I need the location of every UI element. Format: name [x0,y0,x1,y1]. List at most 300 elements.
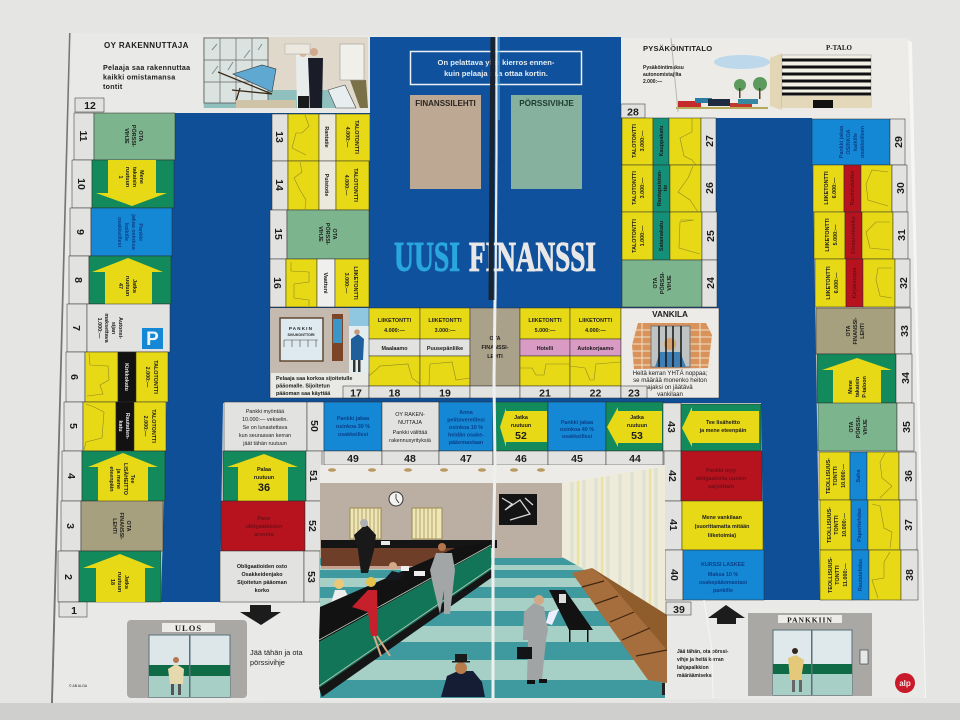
space 37 [820,500,917,550]
barred windows [350,508,442,539]
square number 1: 1 [71,605,77,617]
space 10: 10 [75,178,87,190]
icon: parking sign: P [146,329,159,350]
space 3: OTA [125,521,131,531]
space 4 [62,451,165,501]
space 51: 51 [307,470,319,482]
space 46: Jatka [514,415,528,421]
space 50: 50 [308,420,320,432]
space 11: 11 [77,130,89,142]
space 18: LIIKETONTTI [378,318,411,324]
space 50 [224,402,324,451]
space 21: LIIKETONTTI [528,318,562,324]
space 31: LIIKETONTTI [825,218,831,252]
space 19: LIIKETONTTI [428,318,462,324]
space 24: VIHJE [667,275,673,291]
space 26: tie [663,185,669,191]
space 16: LIIKETONTTI [352,266,358,300]
space 42: 42 [666,470,678,482]
space 16: Vaattuni [322,273,328,294]
space 19: 3.000:— [435,328,456,334]
space 4: eteenpäin [108,466,114,492]
panel: Oy Rakennuttaja [75,37,368,112]
space 51 [223,451,322,501]
space 11 [74,113,175,160]
space 37: Paperitehdas [857,508,863,542]
clerk behind counter [384,562,409,580]
space 11: VIHJE [123,128,129,144]
space 34: takaisin [855,377,861,397]
space 37: 10.000:— [842,513,848,537]
space 26: 3.000:— [640,177,646,198]
space 14: Puistotie [323,174,329,196]
space 26: Rantapuiston- [657,170,663,206]
rule box: kuin pelaaja saa ottaa kortin. [444,69,548,78]
space 25: 25 [705,230,717,242]
space 53: 53 [305,571,317,583]
space 5: 5 [67,423,79,429]
arrow: down [240,605,281,625]
space 36: 36 [903,470,915,482]
rule box: On pelattava yksi kierros ennen- [438,58,554,67]
space 29: 29 [893,136,905,148]
space 29: osakkeilleen [860,126,866,158]
space 29: kaikille [853,133,859,151]
space 43: ja mene eteenpäin [699,428,746,434]
space 8: Jatka [131,279,137,293]
panel: bank branch space 17 [270,308,369,400]
space 41: Mene vankilaan [702,515,742,521]
space 15: VIHJE [317,226,323,242]
illustration: bank window: SIVUKONTTORI [287,333,315,337]
space 30: 6.000:— [832,177,838,198]
heading: PYSÄKÖINTITALO [643,44,712,53]
space 36: Saha [856,469,862,482]
businessman with briefcase [517,595,559,684]
panel: central title area [370,37,621,307]
square number 28: 28 [627,106,639,118]
space 18 [369,308,420,400]
space 5: 2.000:— [142,416,148,437]
rule text: pääoman saa käyttää [276,391,331,397]
coffee table [549,590,593,642]
space 33: LEHTI [860,323,866,339]
space 35: 35 [901,421,913,433]
space 29: OSINKOA [846,129,852,155]
space 21: Hotelli [537,346,554,352]
space 14: 4.000:— [343,175,349,196]
space 5: TALOTONTTI [150,409,156,443]
space 24: OTA [653,278,659,288]
space 48: Pankki välittää [393,430,427,436]
space 44: 44 [629,453,641,465]
floor stripes [320,558,665,698]
space 24 [622,260,717,307]
rule text: Pelaaja saa rakennuttaa [103,64,190,72]
space 3: LEHTI [111,518,117,534]
square number 23: 23 [628,388,640,400]
space 50: Se on lunastettava [243,425,287,431]
square number 28 [621,104,645,118]
space 27: Kauppakatu [659,126,665,156]
illustration: Pankkiin door [748,613,872,696]
space 21: 21 [539,388,551,400]
space 52: obligaatioiden [246,524,282,530]
space 51: ruutuun [254,475,274,481]
space 44: Jatka [630,415,644,421]
space 5 [64,402,166,451]
space 22 [570,308,621,400]
rule text: ajaksi on jäätävä [647,384,693,391]
space 27: TALOTONTTI [632,124,638,158]
rule text: Pysäköintimaksu [643,65,684,71]
space 10: 1 [117,176,123,178]
space 51: Palaa [257,467,271,473]
space 27: 3.000:— [640,130,646,151]
space 13: 13 [273,131,285,143]
space 47 [439,402,493,465]
space 33: 33 [899,325,911,337]
space 4: ja mene [115,468,121,489]
space 40 [665,550,764,600]
space 20: OTA [490,336,500,342]
space 22: LIIKETONTTI [579,318,612,324]
space 29 [812,119,905,165]
panel: Pysäköintitalo parking garage [621,38,908,118]
space 14: 14 [273,179,285,191]
space 4: 4 [65,473,77,479]
space 52: arvonta [254,532,275,538]
space 53: Obligaatioiden osto [237,564,287,570]
space 3 [61,501,163,551]
space 40: 40 [668,569,680,581]
space 33: FINANSSI- [853,317,859,344]
space 22: 4.000:— [585,328,606,334]
space 49: osinkoa 30 % [336,424,370,430]
space 38 [820,550,918,600]
space 41: (suorittamatta mitään [695,524,749,530]
space 46 [493,402,548,465]
heading: VANKILA [652,310,688,319]
space 38: TEOLLISUUS- [828,557,834,593]
space 11: PÖRSSI- [130,125,137,147]
space 21 [520,308,570,400]
space 25: Satamakatu [659,221,665,251]
space 7: sijan [110,322,116,334]
teller at back [354,519,390,573]
space 41 [664,501,763,550]
heading: OY RAKENNUTTAJA [104,41,189,50]
space 46: 52 [515,430,527,442]
space 52 [221,501,321,551]
arrow: up [708,605,745,624]
man in hat [441,654,485,697]
rule text: lahjapalkkion [677,665,709,671]
space 40: KURSSI LASKEE [701,562,745,568]
space 46: ruutuun [511,423,531,429]
space 10: Mene [138,170,144,184]
space 18: Maalaamo [381,346,408,352]
space 18: 18 [389,388,400,400]
illustration: Pankkiin door: PANKKIIN [787,616,833,624]
space 2 [58,551,161,602]
space 10 [72,160,174,208]
space 14: TALOTONTTI [352,168,358,202]
space 37: TONTTI [834,515,840,535]
space 27: 27 [704,135,716,147]
illustration: Ulos door [127,620,247,698]
space 21: 5.000:— [535,328,556,334]
space 24: 24 [705,277,717,289]
space 6: TALOTONTTI [152,360,158,394]
space 42 [664,451,762,501]
teller counter [319,540,497,697]
square number 12: 12 [84,100,96,112]
space 19 [420,308,470,400]
space 45: osinkoa 40 % [560,427,594,433]
space 36: TEOLLISUUS- [826,458,832,494]
illustration: architect's office [203,37,368,108]
illustration: prisoner behind bars [632,323,712,369]
space 31: 5.000:— [833,224,839,245]
space 19: Puusepänliike [427,346,463,352]
space 34: 34 [900,372,912,384]
space 24: PÖRSSI- [659,272,666,294]
space 30: LIIKETONTTI [824,171,830,205]
customer: man in grey suit at counter [414,543,455,614]
space 31: 31 [896,229,908,241]
copyright: © AB ALGA [69,684,88,688]
illustration: parking building and cars [676,44,871,110]
space 6: 6 [68,374,80,380]
rule text: Heitä kerran YHTÄ noppaa; [633,370,707,377]
space 4: LISÄHEITTO [122,463,129,495]
space 14 [272,161,369,210]
space 20: LEHTI [487,354,503,360]
space 38: TONTTI [835,565,841,585]
space 48: 48 [404,453,416,465]
space 4: Tee [129,475,135,483]
space 10: takaisin [131,167,137,187]
customer: girl [330,579,351,608]
space 9 [70,208,172,256]
space 47: osinkoa 10 % [449,425,483,431]
space 35: OTA [849,422,855,432]
space 9: 9 [74,229,86,235]
space 44: 53 [631,430,643,442]
space 50: kun seuraavan kerran [239,433,291,439]
space 27 [622,118,716,165]
space 32: 6.000:— [834,272,840,293]
space 3: FINANSSI- [118,513,124,540]
space 37: TEOLLISUUS- [827,507,833,543]
space 38: Rautatehdas [858,559,864,591]
rule text: pörssivihje [250,658,285,667]
space 51: 36 [258,482,270,494]
space 2: Jatka [123,575,129,589]
space 50: jäät tähän ruutuun [242,441,287,447]
space 34 [817,354,912,403]
space 15: PÖRSSI- [324,223,331,245]
space 47: 47 [460,453,472,465]
space 20 [470,308,520,398]
space 38: 11.000:— [843,563,849,587]
space 47: Anna [459,410,473,416]
wall clock [389,492,403,506]
rule text: vihje ja heitä kerran [677,657,724,663]
card slot: Pörssivihje: PÖRSSIVIHJE [519,98,574,108]
space 26: TALOTONTTI [632,171,638,205]
space 9: jakaa osinkoa [130,213,136,251]
space 48: OY RAKEN- [395,412,425,418]
space 50: Pankki myöntää [246,409,284,415]
space 34: P-taloon [862,376,868,398]
square number 12 [75,98,104,112]
space 15 [270,210,369,259]
space 2: 18 [109,579,115,585]
space 2: 2 [62,574,74,580]
space 40: pankille [713,588,733,594]
rule text: 2.000:— [643,79,662,85]
space 8: 47 [117,283,123,289]
space 45 [548,402,606,465]
space 6 [66,352,168,402]
card slot: Finanssilehti [410,95,481,189]
square number 17: 17 [350,388,362,400]
square number 1 [59,602,87,617]
space 40: Maksa 10 % [708,572,738,578]
space 7: Autonsi- [117,317,123,339]
square number 39 [666,602,691,616]
space 32: Kirjakauppa [852,267,858,298]
back counter [321,540,497,569]
space 13: TALOTONTTI [353,120,359,154]
space 5: katu [117,420,123,432]
game title: UUSI [394,235,460,281]
space 26: 26 [704,182,716,194]
space 48: NUTTAJA [398,420,422,426]
space 9: Pankki [137,223,143,241]
space 18: 4.000:— [384,328,405,334]
space 34: Mene [848,380,854,394]
space 45: 45 [571,453,583,465]
space 36 [819,452,916,500]
space 25: 1.000:— [640,225,646,246]
space 25 [622,212,717,260]
rule text: Pelaaja saa korkoa sijoitetulle [276,376,352,382]
space 10: ruutuun [124,167,130,187]
space 47: heidän osake- [448,432,484,438]
space 53: Osakkeidenjako [241,572,283,578]
space 19: 19 [439,388,451,400]
sofa [572,568,667,695]
space 48: rakennusyrityksiä [389,438,431,444]
illustration: bank interior [319,465,667,698]
illustration: parking building and cars: P-TALO [826,44,853,52]
curtain wall [562,466,665,614]
illustration: Ulos door: ULOS [175,623,202,633]
customer: woman in red [352,577,390,656]
space 16 [270,259,369,307]
rule box [410,52,582,84]
rule text: se määrää monenko heiton [633,377,707,384]
rule text: vankilaan [657,391,683,398]
space 8: ruutuun [124,276,130,296]
space 26 [622,165,716,212]
space 43: Tee lisäheitto [706,420,740,426]
space 22: Autokorjaamo [577,346,614,352]
panel: exit corner Ulos [59,602,303,698]
space 45: osakkeillesi [562,434,593,440]
game title: FINANSSI [469,235,596,281]
card slot: Finanssilehti: FINANSSILEHTI [415,99,476,108]
space 13 [272,114,370,161]
panel: bank entrance corner Pankkiin [666,602,915,696]
square number 39: 39 [673,604,685,616]
space 37: 37 [903,519,915,531]
space 15: 15 [272,228,284,240]
space 16: 16 [271,277,283,289]
space 8: 8 [72,277,84,283]
space 31 [814,212,908,259]
illustration: bank window [271,308,369,373]
panel: Vankila prison [621,308,719,400]
rule text: autonomistajilta [643,72,682,78]
space 33: OTA [846,326,852,336]
space 7: maksettava [103,313,109,344]
space 41: liiketoimia) [708,533,736,539]
space 42: sarjoittain [708,484,734,490]
space 11: OTA [137,131,143,141]
space 16: 3.000:— [343,273,349,294]
space 47: pelitovereillesi [447,418,485,424]
space 25: TALOTONTTI [632,219,638,253]
space 20: FINANSSI- [482,345,509,351]
space 49 [324,402,382,465]
space 45: Pankki jakaa [561,420,593,426]
space 38: 38 [904,569,916,581]
space 42: obligaatioita uusien [696,476,746,482]
logo [895,673,915,693]
card slot: Pörssivihje [511,95,582,189]
space 8 [69,256,171,304]
space 9: osakkeillesi [116,217,122,248]
space 43: 43 [665,421,677,433]
space 52: 52 [306,520,318,532]
space 44: ruutuun [627,423,647,429]
rule text: määräämiseksi [677,673,713,679]
space 29: Pankki jakaa [839,126,845,158]
space 13: 4.000:— [344,127,350,148]
space 52: Pane [258,516,270,522]
space 32 [815,259,910,307]
space 36: 10.000:— [841,464,847,488]
game title [394,235,596,281]
space 49: 49 [347,453,359,465]
space 32: 32 [898,277,910,289]
space 32: LIIKETONTTI [826,266,832,300]
space 49: Pankki jakaa [337,416,369,422]
space 30: 30 [895,182,907,194]
space 53: korko [255,588,270,594]
space 33 [816,308,911,354]
space 43 [663,403,761,451]
space 30: Ravintolaliike [850,171,856,205]
space 53: Sijoitetun pääoman [237,580,287,586]
space 15: OTA [331,229,337,239]
space 31: Elintarvikeliike [851,216,857,254]
space 7: 1.000:— [96,318,102,339]
